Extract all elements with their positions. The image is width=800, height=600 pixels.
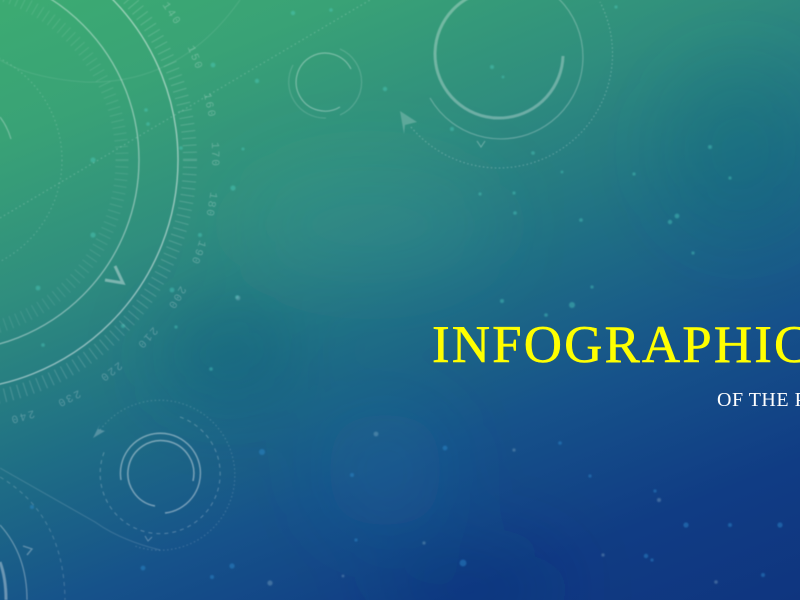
dial inner ring <box>0 0 139 351</box>
bottom ring group <box>0 400 235 550</box>
arrowhead <box>400 111 417 134</box>
thin arc <box>430 0 583 139</box>
dial scale numbers: 150 <box>184 44 205 73</box>
dial scale numbers: 160 <box>200 92 217 120</box>
dial scale numbers: 200 <box>164 283 188 312</box>
dial scale numbers: 170 <box>208 142 220 168</box>
arrowhead <box>93 424 105 438</box>
dial scale numbers <box>8 0 220 425</box>
lower blue stars <box>30 441 783 579</box>
pale stars <box>236 296 718 586</box>
thin sweep arc <box>0 0 240 82</box>
thin arc <box>0 525 27 600</box>
connector line <box>0 468 160 550</box>
dial scale numbers: 190 <box>187 239 207 267</box>
dotted diagonal <box>0 0 370 218</box>
large dial <box>0 0 370 402</box>
dotted arc <box>411 2 613 168</box>
thick arc <box>0 562 6 600</box>
dotted ring <box>100 400 235 550</box>
nebula clouds <box>160 60 800 600</box>
top ring group <box>400 0 613 168</box>
dial scale numbers: 140 <box>159 0 183 29</box>
thick arc <box>435 0 563 118</box>
dial scale numbers: 220 <box>96 358 124 384</box>
small chevron <box>145 536 152 541</box>
dashed arc <box>0 477 65 600</box>
small outer arc left <box>289 65 326 118</box>
dial centre arc <box>0 117 11 139</box>
HUD graphics <box>0 0 613 600</box>
dial inner ticks <box>0 0 122 334</box>
dial scale numbers: 230 <box>54 386 82 409</box>
dashed ring <box>100 417 220 534</box>
dial outer ticks <box>0 0 190 402</box>
chevron <box>23 546 32 555</box>
dial outer ring <box>0 0 178 390</box>
small outer arc right <box>340 49 362 115</box>
bottom-left arcs <box>0 477 65 600</box>
dial scale numbers: 180 <box>202 191 218 219</box>
small ring group <box>289 49 362 118</box>
dial chevron <box>105 266 123 283</box>
stars <box>36 5 732 371</box>
outer arc <box>120 433 200 513</box>
dial scale numbers: 240 <box>8 406 36 425</box>
dial scale numbers: 210 <box>133 324 159 351</box>
inner arc <box>128 441 194 506</box>
dial dotted ring <box>0 46 62 274</box>
small inner arc <box>296 53 351 111</box>
small chevron <box>477 141 485 147</box>
